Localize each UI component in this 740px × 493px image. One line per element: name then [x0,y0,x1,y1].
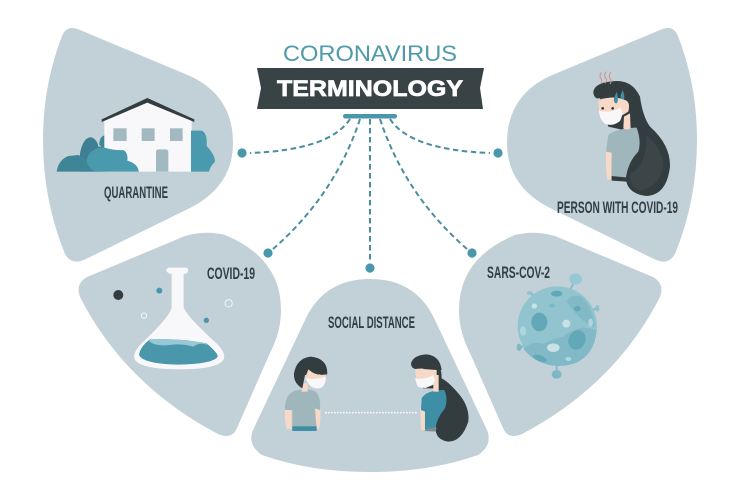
panel shape: person [507,28,697,262]
connector hub bar [343,114,397,118]
label: quarantine: QUARANTINE [104,184,168,202]
panel shape: covid-19 [79,233,281,436]
icon: two people keeping distance [285,354,469,442]
banner ribbon [257,68,484,109]
label: sars-cov-2: SARS-COV-2 [487,264,550,282]
panel: covid-19 [79,233,281,436]
connectors: dashed lines to panels [250,119,490,262]
panel shape: social distance [251,279,489,472]
banner text: TERMINOLOGY [277,76,463,101]
connector end dots [237,148,503,273]
label: social distance: SOCIAL DISTANCE [328,314,415,332]
panel shape: sars-cov-2 [459,233,661,436]
label: covid-19: COVID-19 [207,265,255,283]
panel: quarantine [43,28,233,262]
panel shape: quarantine [43,28,233,262]
title banner: terminology [257,68,484,109]
icon: sick woman with mask [593,72,670,196]
title: coronavirus: CORONAVIRUS [283,41,457,66]
panel: sars-cov-2 [459,233,661,436]
icon: virus [517,273,599,379]
icon: house with bushes [57,98,215,172]
panel: person with covid-19 [507,28,697,262]
icon: flask [113,268,232,369]
panel: social distance [251,279,489,472]
